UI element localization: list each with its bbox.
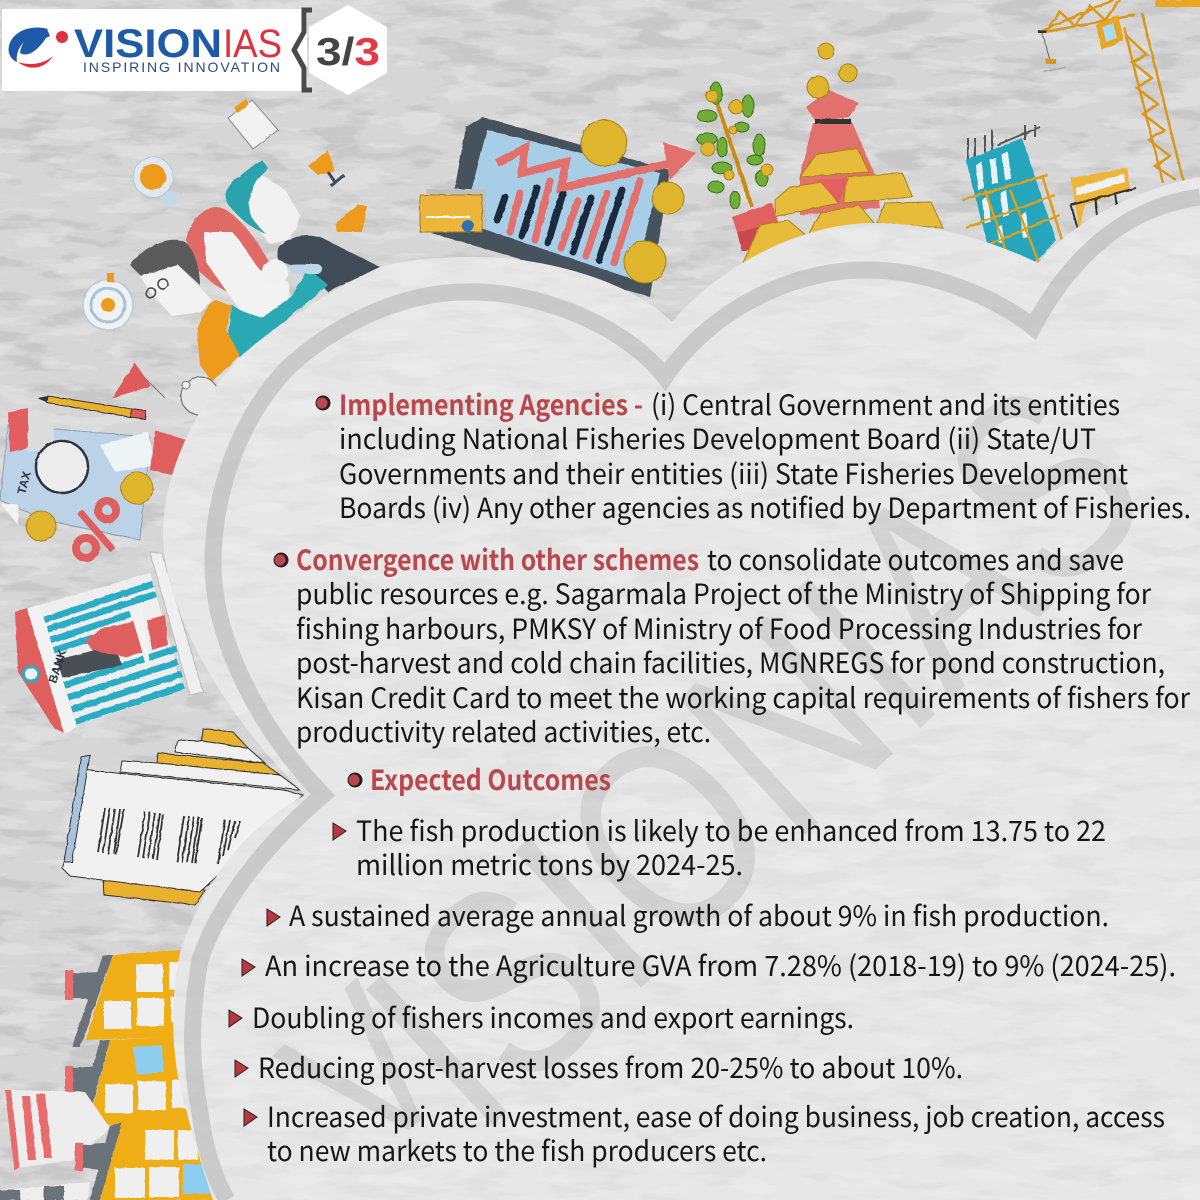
body: productivity related activities, etc.	[296, 711, 711, 751]
body: fishing harbours, PMKSY of Ministry of Food Processing Industries for	[296, 608, 1142, 648]
brace	[294, 10, 312, 90]
heading: Convergence with other schemes	[296, 539, 699, 579]
logo IAS: IAS	[223, 22, 282, 66]
icon: trophy	[308, 150, 344, 186]
logo globe	[9, 28, 68, 68]
heading: Implementing Agencies -	[339, 384, 643, 424]
icon: stopwatch	[181, 377, 219, 415]
illustration: stacked documents	[62, 729, 303, 905]
illustration: gold bars and money bag	[742, 43, 943, 265]
outcome: fish production: million metric tons by 2024-25.	[356, 844, 743, 884]
body: including National Fisheries Development Board (ii) State/UT	[339, 418, 1096, 458]
text block: convergence	[274, 539, 1190, 751]
body: Governments and their entities (iii) State Fisheries Development	[339, 453, 1128, 493]
illustration: bank: BANK	[46, 647, 70, 685]
illustration: laptop with growth chart	[420, 117, 696, 297]
body: to consolidate outcomes and save	[707, 539, 1124, 579]
heading: Expected Outcomes	[370, 759, 611, 799]
bullet	[348, 772, 362, 788]
logo plate	[2, 9, 307, 91]
outcome: fish production: The fish production is likely to be enhanced from 13.75 to 22	[356, 810, 1106, 850]
illustration: tax document and magnifier	[0, 408, 186, 558]
outcome: post-harvest losses: Reducing post-harvest losses from 20-25% to about 10%.	[258, 1047, 963, 1087]
text block: implementing agencies	[316, 384, 1191, 527]
outcome: doubling incomes: Doubling of fishers incomes and export earnings.	[252, 997, 854, 1037]
text block: expected outcomes	[229, 759, 1176, 1170]
illustration: tax document and magnifier: TAX	[14, 470, 34, 496]
outcome: private investment: Increased private investment, ease of doing business, job creation, access	[267, 1096, 1165, 1136]
illustration: bank	[15, 552, 203, 733]
header logo	[2, 5, 387, 95]
illustration: yellow building with balconies	[0, 950, 225, 1200]
logo name: VISION	[74, 22, 222, 66]
icon: diamond	[335, 205, 367, 232]
icon: flag	[112, 363, 165, 398]
watermark: V	[239, 942, 490, 1199]
outcome: fish production	[333, 810, 1106, 884]
outcome: private investment: to new markets to the fish producers etc.	[267, 1130, 767, 1170]
illustration: three people	[130, 160, 380, 382]
illustration: building under construction	[962, 125, 1136, 265]
icon: clipboard	[228, 99, 278, 149]
icon: pencil	[37, 396, 146, 419]
bullet	[274, 552, 288, 568]
icon: light bulb	[133, 157, 180, 207]
logo tagline: INSPIRING INNOVATION	[83, 59, 280, 75]
watermark	[272, 396, 1133, 1130]
illustration: money plant	[697, 82, 780, 252]
body: public resources e.g. Sagarmala Project of the Ministry of Shipping for	[296, 573, 1151, 613]
page number: 3/3	[316, 31, 380, 74]
outcome: agriculture GVA: An increase to the Agriculture GVA from 7.28% (2018-19) to 9% (2024-25).	[265, 945, 1176, 985]
hexagon badge	[309, 5, 387, 95]
bullet	[316, 396, 330, 410]
cloud panel	[163, 177, 1200, 1200]
body: post-harvest and cold chain facilities, MGNREGS for pond construction,	[296, 642, 1165, 682]
body	[339, 384, 1191, 527]
illustration: construction crane	[1038, 0, 1200, 183]
body	[296, 539, 1190, 751]
icon: target	[83, 273, 133, 330]
body: (i) Central Government and its entities	[651, 384, 1120, 424]
outcome: private investment	[244, 1096, 1165, 1170]
outcome: annual growth: A sustained average annual growth of about 9% in fish production.	[289, 895, 1109, 935]
